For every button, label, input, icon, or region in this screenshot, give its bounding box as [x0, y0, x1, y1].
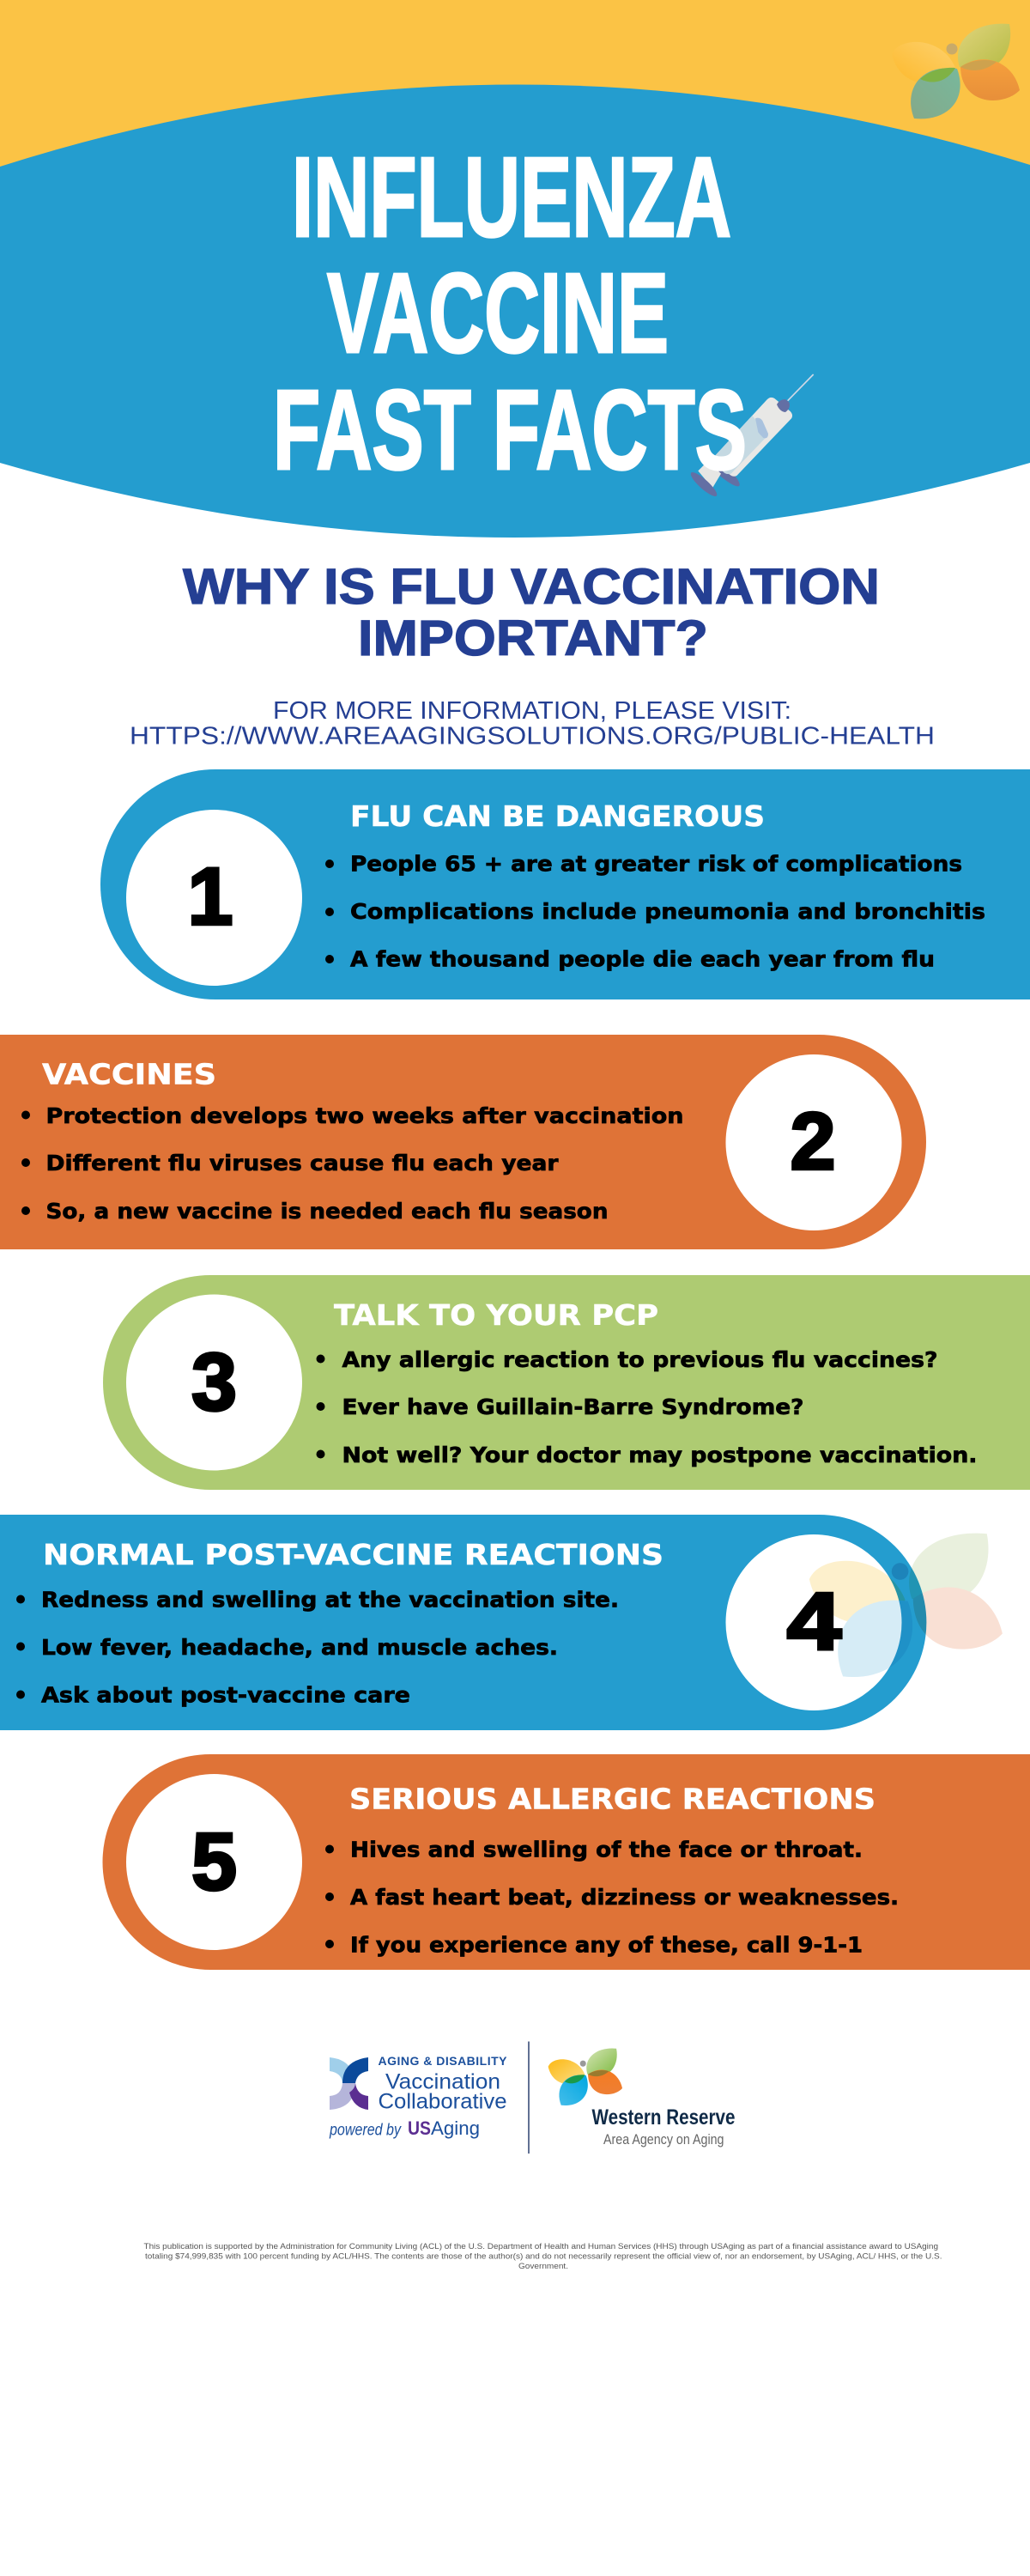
funding disclaimer: Government. — [518, 2262, 568, 2271]
panel 3: talk to your PCP: Any allergic reaction to previous flu vaccines? — [342, 1347, 937, 1372]
panel 5: serious allergic reactions: Hives and swelling of the face or throat. — [350, 1838, 863, 1862]
panel 1: flu can be dangerous — [100, 769, 1030, 999]
title: VACCINE — [327, 250, 669, 376]
heading: why is flu vaccination important: IMPORTANT? — [358, 611, 708, 666]
icon: faded butterfly watermark — [809, 1534, 1003, 1677]
panel 5: serious allergic reactions: If you experience any of these, call 9-1-1 — [350, 1932, 863, 1958]
logo: vaccination collaborative: powered by — [329, 2121, 402, 2140]
panel 3: talk to your PCP: 3 — [191, 1337, 237, 1428]
panel 5: serious allergic reactions: A fast heart beat, dizziness or weaknesses. — [350, 1885, 899, 1910]
panel 2: vaccines: 2 — [791, 1096, 835, 1187]
logo: vaccination collaborative: Vaccination — [385, 2069, 500, 2093]
panel 1: flu can be dangerous: Complications include pneumonia and bronchitis — [350, 899, 985, 924]
logo: vaccination collaborative: Collaborative — [378, 2090, 506, 2114]
title: FAST FACTS — [273, 367, 747, 493]
icon: syringe — [688, 374, 814, 499]
title: INFLUENZA — [292, 134, 731, 260]
logo: vaccination collaborative — [329, 2054, 507, 2140]
panel 2: vaccines: Protection develops two weeks after vaccination — [46, 1103, 683, 1128]
panel 1: flu can be dangerous: People 65 + are at greater risk of complications — [350, 852, 962, 876]
panel 4: normal post-vaccine reactions: Low fever, headache, and muscle aches. — [41, 1635, 558, 1660]
panel 4: normal post-vaccine reactions: NORMAL POST-VACCINE REACTIONS — [43, 1538, 663, 1571]
funding disclaimer: totaling $74,999,835 with 100 percent funding by ACL/HHS. The contents are those of the author(s) and do not necessarily represent the official view of, nor an endorsement, by USAging, ACL/ HHS, or the U.S. — [145, 2251, 942, 2262]
heading: why is flu vaccination important: WHY IS FLU VACCINATION — [183, 559, 880, 615]
panel 5: serious allergic reactions — [103, 1754, 1030, 1970]
heading: why is flu vaccination important — [183, 559, 880, 666]
text block: more information link: HTTPS://WWW.AREAAGINGSOLUTIONS.ORG/PUBLIC-HEALTH — [130, 723, 935, 750]
panel 1: flu can be dangerous: 1 — [188, 852, 233, 943]
panel 2: vaccines: VACCINES — [42, 1058, 216, 1091]
panel 5: serious allergic reactions: 5 — [191, 1817, 237, 1908]
blue header arc shape — [0, 84, 1030, 538]
logo: western reserve area agency on aging: Area Agency on Aging — [603, 2131, 724, 2148]
panel 4: normal post-vaccine reactions — [0, 1515, 926, 1730]
funding disclaimer — [144, 2242, 942, 2271]
panel 3: talk to your PCP: Ever have Guillain-Barre Syndrome? — [342, 1394, 803, 1419]
logo: vaccination collaborative: AGING & DISABILITY — [378, 2054, 507, 2068]
panel 5: serious allergic reactions: SERIOUS ALLERGIC REACTIONS — [349, 1783, 876, 1815]
yellow header background — [0, 0, 1030, 258]
logo: vaccination collaborative: US — [408, 2117, 431, 2139]
title — [273, 134, 747, 493]
logo: western reserve area agency on aging: Western Reserve — [592, 2105, 736, 2129]
panel 3: talk to your PCP: Not well? Your doctor may postpone vaccination. — [342, 1443, 977, 1467]
panel 1: flu can be dangerous: FLU CAN BE DANGEROUS — [350, 799, 765, 833]
panel 4: normal post-vaccine reactions: Redness and swelling at the vaccination site. — [41, 1587, 619, 1613]
logo divider — [528, 2042, 530, 2154]
panel 2: vaccines — [0, 1035, 926, 1249]
logo: vaccination collaborative: Aging — [431, 2117, 480, 2139]
panel 3: talk to your PCP: TALK TO YOUR PCP — [334, 1298, 658, 1332]
logo: western reserve area agency on aging — [548, 2049, 736, 2148]
panel 3: talk to your PCP — [103, 1275, 1030, 1490]
panel 2: vaccines: Different flu viruses cause flu each year — [46, 1151, 559, 1176]
panel 4: normal post-vaccine reactions: Ask about post-vaccine care — [41, 1683, 410, 1707]
text block: more information link — [130, 697, 935, 750]
text block: more information link: FOR MORE INFORMATION, PLEASE VISIT: — [273, 697, 791, 725]
funding disclaimer: This publication is supported by the Administration for Community Living (ACL) of the U.S. Department of Health and Human Services (HHS) through USAging as part of a financial assistance award to USAging — [144, 2242, 938, 2251]
icon: butterfly logo, top right — [892, 24, 1020, 118]
panel 2: vaccines: So, a new vaccine is needed each flu season — [46, 1199, 608, 1224]
panel 1: flu can be dangerous: A few thousand people die each year from flu — [350, 946, 935, 972]
panel 4: normal post-vaccine reactions: 4 — [787, 1577, 841, 1668]
